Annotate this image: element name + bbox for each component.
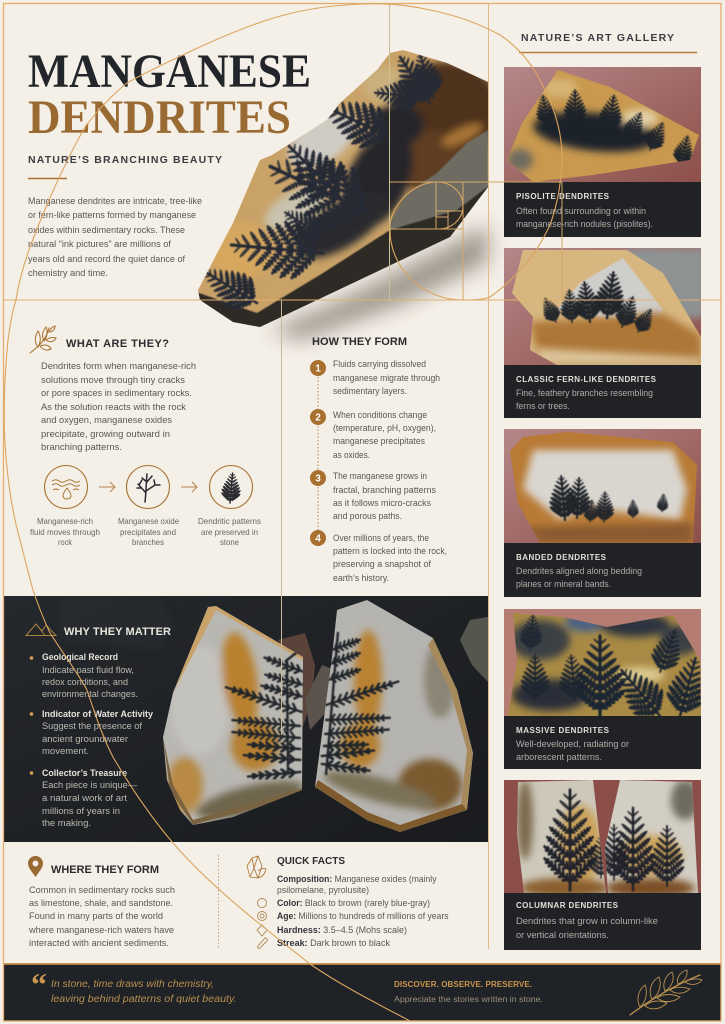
point: geological record: Geological Record — [42, 651, 118, 662]
step captions: are preserved in — [201, 528, 258, 537]
body text: precipitate, growing outward in — [41, 429, 170, 440]
card: columnar dendrites: Dendrites that grow in column-like — [516, 916, 658, 926]
body text: where manganese-rich waters have — [28, 925, 174, 936]
step captions: rock — [58, 538, 73, 547]
left rock half — [163, 606, 303, 825]
golden spiral — [4, 4, 562, 1021]
card: columnar dendrites: or vertical orientations. — [516, 930, 609, 940]
step 3 — [310, 470, 436, 522]
panel: nature's art gallery — [504, 32, 714, 950]
body text: As the solution reacts with the rock — [41, 402, 186, 413]
step 3: and porous paths. — [333, 511, 402, 522]
point: collector's treasure: a natural work of art — [42, 793, 127, 804]
step 4 — [310, 530, 447, 584]
icon: gold branch — [630, 970, 702, 1015]
fact list — [277, 874, 449, 948]
body text: Dendrites form when manganese-rich — [41, 361, 196, 372]
panel: quick facts — [247, 856, 449, 948]
step captions: branches — [132, 538, 164, 547]
card: massive dendrites: arborescent patterns. — [516, 752, 602, 762]
icon: sprig — [30, 326, 56, 353]
card: massive dendrites: MASSIVE DENDRITES — [516, 726, 610, 735]
fact list: Color: Black to brown (rarely blue-gray) — [277, 898, 430, 908]
arrow — [181, 482, 197, 492]
point: indicator of water activity — [30, 708, 154, 757]
body text: solutions move through tiny cracks — [41, 375, 185, 386]
step 3: 3 — [315, 474, 321, 484]
quote: In stone, time draws with chemistry, — [51, 978, 214, 990]
quote — [51, 978, 236, 1005]
fact list: Hardness: 3.5–4.5 (Mohs scale) — [277, 925, 407, 935]
card: banded dendrites: Dendrites aligned along bedding — [516, 566, 642, 576]
subtitle: NATURE’S BRANCHING BEAUTY — [28, 154, 222, 166]
point: collector's treasure: Collector’s Treasure — [42, 767, 127, 778]
card: pisolite dendrites: PISOLITE DENDRITES — [516, 192, 610, 201]
step captions: stone — [220, 538, 239, 547]
call to action: Appreciate the stories written in stone. — [394, 994, 543, 1004]
body text: Common in sedimentary rocks such — [29, 885, 175, 896]
icon: preserved fern — [210, 466, 252, 508]
point: indicator of water activity: ancient groundwater — [42, 734, 129, 745]
card: pisolite dendrites — [504, 67, 701, 237]
fact list: Composition: Manganese oxides (mainly — [277, 874, 437, 884]
card: columnar dendrites: COLUMNAR DENDRITES — [516, 901, 619, 910]
heading: NATURE’S ART GALLERY — [521, 32, 674, 44]
step 3: as it follows micro-cracks — [333, 498, 431, 509]
title: MANGANESE — [28, 45, 311, 98]
point: collector's treasure: millions of years in — [42, 806, 120, 817]
body text: as limestone, shale, and sandstone. — [29, 898, 173, 909]
card: columnar dendrites — [504, 780, 710, 950]
intro paragraph — [28, 196, 202, 279]
quote: leaving behind patterns of quiet beauty. — [51, 993, 236, 1005]
step 1 — [310, 359, 440, 397]
step captions: Manganese-rich — [37, 517, 93, 526]
card: banded dendrites — [504, 429, 701, 597]
intro paragraph: Manganese dendrites are intricate, tree-like — [28, 196, 202, 207]
title: DENDRITES — [28, 91, 291, 144]
fact list: psilomelane, pyrolusite) — [277, 885, 369, 895]
intro paragraph: or fern-like patterns formed by manganese — [28, 210, 196, 221]
step captions: fluid moves through — [30, 528, 100, 537]
hero photo: dendrite rock — [190, 45, 500, 340]
card: banded dendrites: planes or mineral bands. — [516, 579, 611, 589]
card: pisolite dendrites: manganese-rich nodules (pisolites). — [516, 219, 653, 229]
step 1: sedimentary layers. — [333, 386, 407, 397]
step 3: The manganese grows in — [333, 471, 427, 482]
right rock half — [315, 600, 473, 832]
body text: or pore spaces in sedimentary rocks. — [41, 388, 192, 399]
intro paragraph: natural “ink pictures” are millions of — [28, 239, 171, 250]
card: classic fern-like dendrites: Fine, feathery branches resembling — [516, 388, 653, 398]
step 4: preserving a snapshot of — [333, 559, 431, 570]
heading: WHERE THEY FORM — [51, 864, 159, 876]
body text: interacted with ancient sediments. — [29, 938, 169, 949]
heading: WHY THEY MATTER — [64, 626, 171, 638]
point: collector's treasure — [30, 767, 137, 829]
card: banded dendrites: BANDED DENDRITES — [516, 553, 607, 562]
step 2: manganese precipitates — [333, 436, 425, 447]
step 1: manganese migrate through — [333, 373, 440, 384]
point: geological record: environmental changes. — [42, 689, 138, 700]
point: collector's treasure: the making. — [42, 818, 91, 829]
footer banner — [3, 964, 721, 1021]
step 2: as oxides. — [333, 450, 370, 461]
intro paragraph: chemistry and time. — [28, 268, 108, 279]
point: indicator of water activity: movement. — [42, 746, 89, 757]
heading: QUICK FACTS — [277, 856, 345, 867]
quote mark: “ — [31, 966, 47, 1002]
card: massive dendrites: Well-developed, radiating or — [516, 739, 629, 749]
point: collector's treasure: Each piece is unique— — [42, 780, 137, 791]
body text — [41, 361, 196, 453]
body text: branching patterns. — [41, 442, 122, 453]
body text: and oxygen, manganese oxides — [41, 415, 172, 426]
step captions: Manganese oxide — [118, 517, 179, 526]
intro paragraph: years old and record the quiet dance of — [28, 254, 185, 265]
step 1: 1 — [315, 364, 321, 374]
step 4: Over millions of years, the — [333, 533, 429, 544]
intro paragraph: oxides within sedimentary rocks. These — [28, 225, 185, 236]
point: geological record: redox conditions, and — [42, 677, 128, 688]
step 2: When conditions change — [333, 410, 427, 421]
icon: mountains — [26, 624, 56, 636]
step 4: 4 — [315, 534, 321, 544]
panel: where they form — [28, 856, 175, 949]
icon: map pin — [28, 856, 43, 877]
arrow — [99, 482, 115, 492]
panel: why they matter — [4, 596, 488, 842]
point: indicator of water activity: Suggest the presence of — [42, 721, 142, 732]
step 2 — [310, 409, 436, 461]
dark slate photo with two rock halves — [4, 596, 488, 842]
card: pisolite dendrites: Often found surrounding or within — [516, 206, 646, 216]
step captions: precipitates and — [120, 528, 176, 537]
icon: branching oxide — [126, 466, 170, 508]
timeline connector — [317, 377, 319, 530]
icon: manganese-rich fluid — [44, 466, 88, 508]
fact list: Age: Millions to hundreds of millions of years — [277, 911, 449, 921]
step 2: 2 — [315, 412, 321, 424]
card: massive dendrites — [504, 609, 714, 769]
panel: how they form — [310, 336, 447, 584]
point: geological record: Indicate past fluid flow, — [42, 665, 134, 676]
icon: crystal — [247, 856, 266, 878]
fact icons — [257, 898, 267, 948]
step 4: pattern is locked into the rock, — [333, 546, 447, 557]
step captions: Dendritic patterns — [198, 517, 261, 526]
panel: what are they — [30, 326, 261, 547]
title — [28, 45, 311, 144]
card: classic fern-like dendrites — [504, 248, 705, 418]
step 2: (temperature, pH, oxygen), — [333, 423, 436, 434]
step 4: earth’s history. — [333, 573, 389, 584]
step 3: fractal, branching patterns — [333, 485, 436, 496]
call to action: DISCOVER. OBSERVE. PRESERVE. — [394, 980, 532, 989]
fact list: Streak: Dark brown to black — [277, 938, 390, 948]
step captions — [30, 517, 261, 547]
heading: HOW THEY FORM — [312, 336, 407, 348]
heading: WHAT ARE THEY? — [66, 338, 169, 350]
body text: Found in many parts of the world — [29, 911, 163, 922]
point: geological record — [30, 651, 138, 700]
body text — [28, 885, 175, 949]
point: indicator of water activity: Indicator of Water Activity — [42, 708, 154, 719]
call to action — [394, 980, 543, 1004]
card: classic fern-like dendrites: CLASSIC FERN-LIKE DENDRITES — [516, 375, 657, 384]
step 1: Fluids carrying dissolved — [333, 359, 426, 370]
card: classic fern-like dendrites: ferns or trees. — [516, 401, 570, 411]
